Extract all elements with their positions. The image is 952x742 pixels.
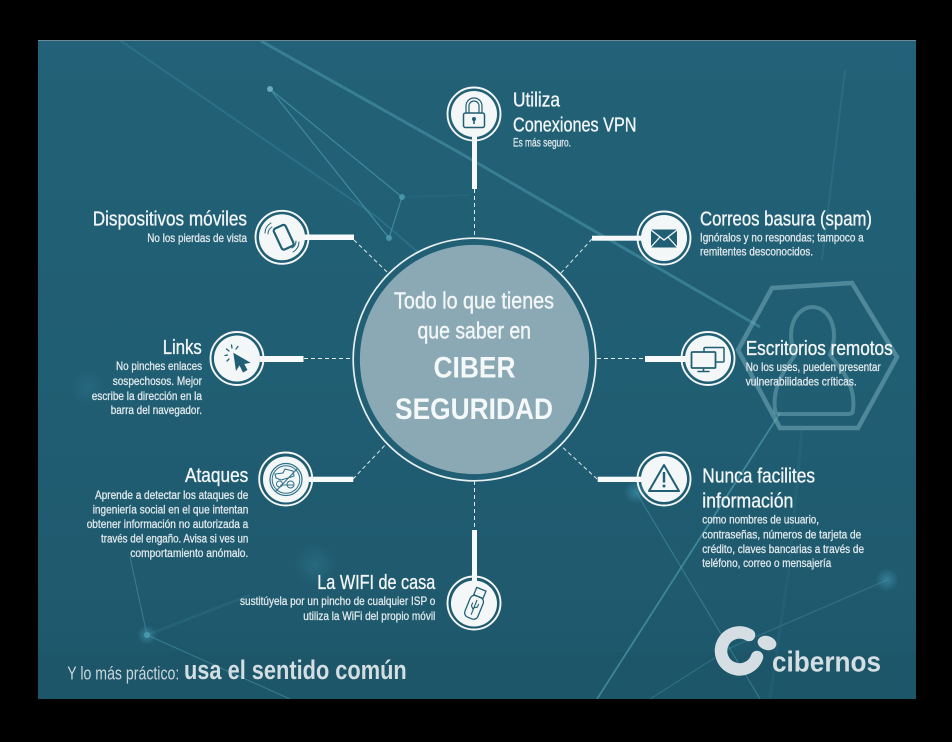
text: never share information (702, 512, 864, 570)
heading: spam: Correos basura (spam) (700, 208, 872, 231)
text: remote desktops: vulnerabilidades críticas. (746, 375, 857, 389)
closing tagline (67, 655, 407, 685)
icon: envelope (651, 230, 677, 248)
icon: padlock (464, 98, 484, 128)
item: VPN (448, 88, 636, 189)
text: never share information: contraseñas, números de tarjeta de (702, 527, 862, 541)
heading: VPN: Utiliza (513, 88, 560, 112)
text: mobile devices: No los pierdas de vista (147, 231, 247, 245)
text: never share information: como nombres de usuario, (702, 512, 819, 526)
icon: warning triangle (649, 465, 679, 491)
item: links (92, 332, 304, 417)
icon: usb drive (463, 587, 488, 621)
central circle (353, 238, 596, 481)
icon: prohibited hat and glasses (270, 464, 302, 496)
central title: SEGURIDAD (395, 393, 553, 426)
text: spam: remitentes desconocidos. (700, 245, 813, 259)
text: attacks: Aprende a detectar los ataques de (95, 488, 249, 502)
item: attacks (87, 452, 353, 560)
text: links: barra del navegador. (111, 403, 202, 417)
dashed connectors (304, 189, 645, 530)
closing tagline: Y lo más práctico: (67, 663, 179, 683)
text: attacks: ingeniería social en el que intentan (93, 503, 248, 517)
central title: CIBER (434, 352, 516, 384)
item: remote desktops (645, 332, 893, 389)
heading: VPN second line: Conexiones VPN (513, 114, 636, 137)
item: never share information (598, 452, 864, 570)
text: remote desktops: No los uses, pueden presentar (746, 360, 881, 374)
text: attacks (87, 488, 249, 560)
closing tagline: usa el sentido común (184, 655, 407, 685)
text: spam: Ignóralos y no respondas; tampoco a (700, 231, 864, 245)
icon: cursor (225, 345, 251, 372)
text: spam (700, 231, 864, 259)
text: links (92, 359, 202, 417)
icon: monitors (692, 348, 724, 372)
heading: never share information second line: información (702, 489, 793, 512)
central title (394, 288, 554, 426)
text: home wifi (240, 594, 436, 623)
text: remote desktops (746, 360, 881, 389)
text: attacks: través del engaño. Avisa si ves un (101, 532, 248, 546)
text: links: sospechosos. Mejor (113, 374, 202, 388)
text: home wifi: sustitúyela por un pincho de cualquier ISP o (240, 594, 436, 608)
logo: cibernos (721, 632, 881, 679)
heading: never share information: Nunca facilites (702, 464, 815, 487)
item: spam (592, 208, 872, 264)
central title: Todo lo que tienes (394, 288, 554, 314)
text: links: No pinches enlaces (116, 359, 202, 373)
heading: links: Links (163, 336, 202, 359)
item: mobile devices (93, 208, 354, 264)
text: never share information: teléfono, correo o mensajería (702, 556, 832, 570)
text: home wifi: utiliza la WiFi del propio móvil (303, 609, 435, 623)
heading: home wifi: La WIFI de casa (317, 571, 436, 594)
text: links: escribe la dirección en la (92, 389, 202, 403)
icon: phone (265, 223, 299, 252)
logo: cibernos: cibernos (772, 647, 881, 679)
heading: attacks: Ataques (185, 464, 248, 487)
central title: que saber en (418, 317, 531, 343)
text: attacks: obtener información no autorizada a (87, 517, 249, 531)
heading: mobile devices: Dispositivos móviles (93, 208, 247, 231)
text: VPN: Es más seguro. (513, 136, 571, 150)
text: never share information: crédito, claves bancarias a través de (702, 542, 864, 556)
item: home wifi (240, 530, 500, 630)
text: attacks: comportamiento anómalo. (130, 546, 248, 560)
heading: remote desktops: Escritorios remotos (746, 337, 893, 360)
